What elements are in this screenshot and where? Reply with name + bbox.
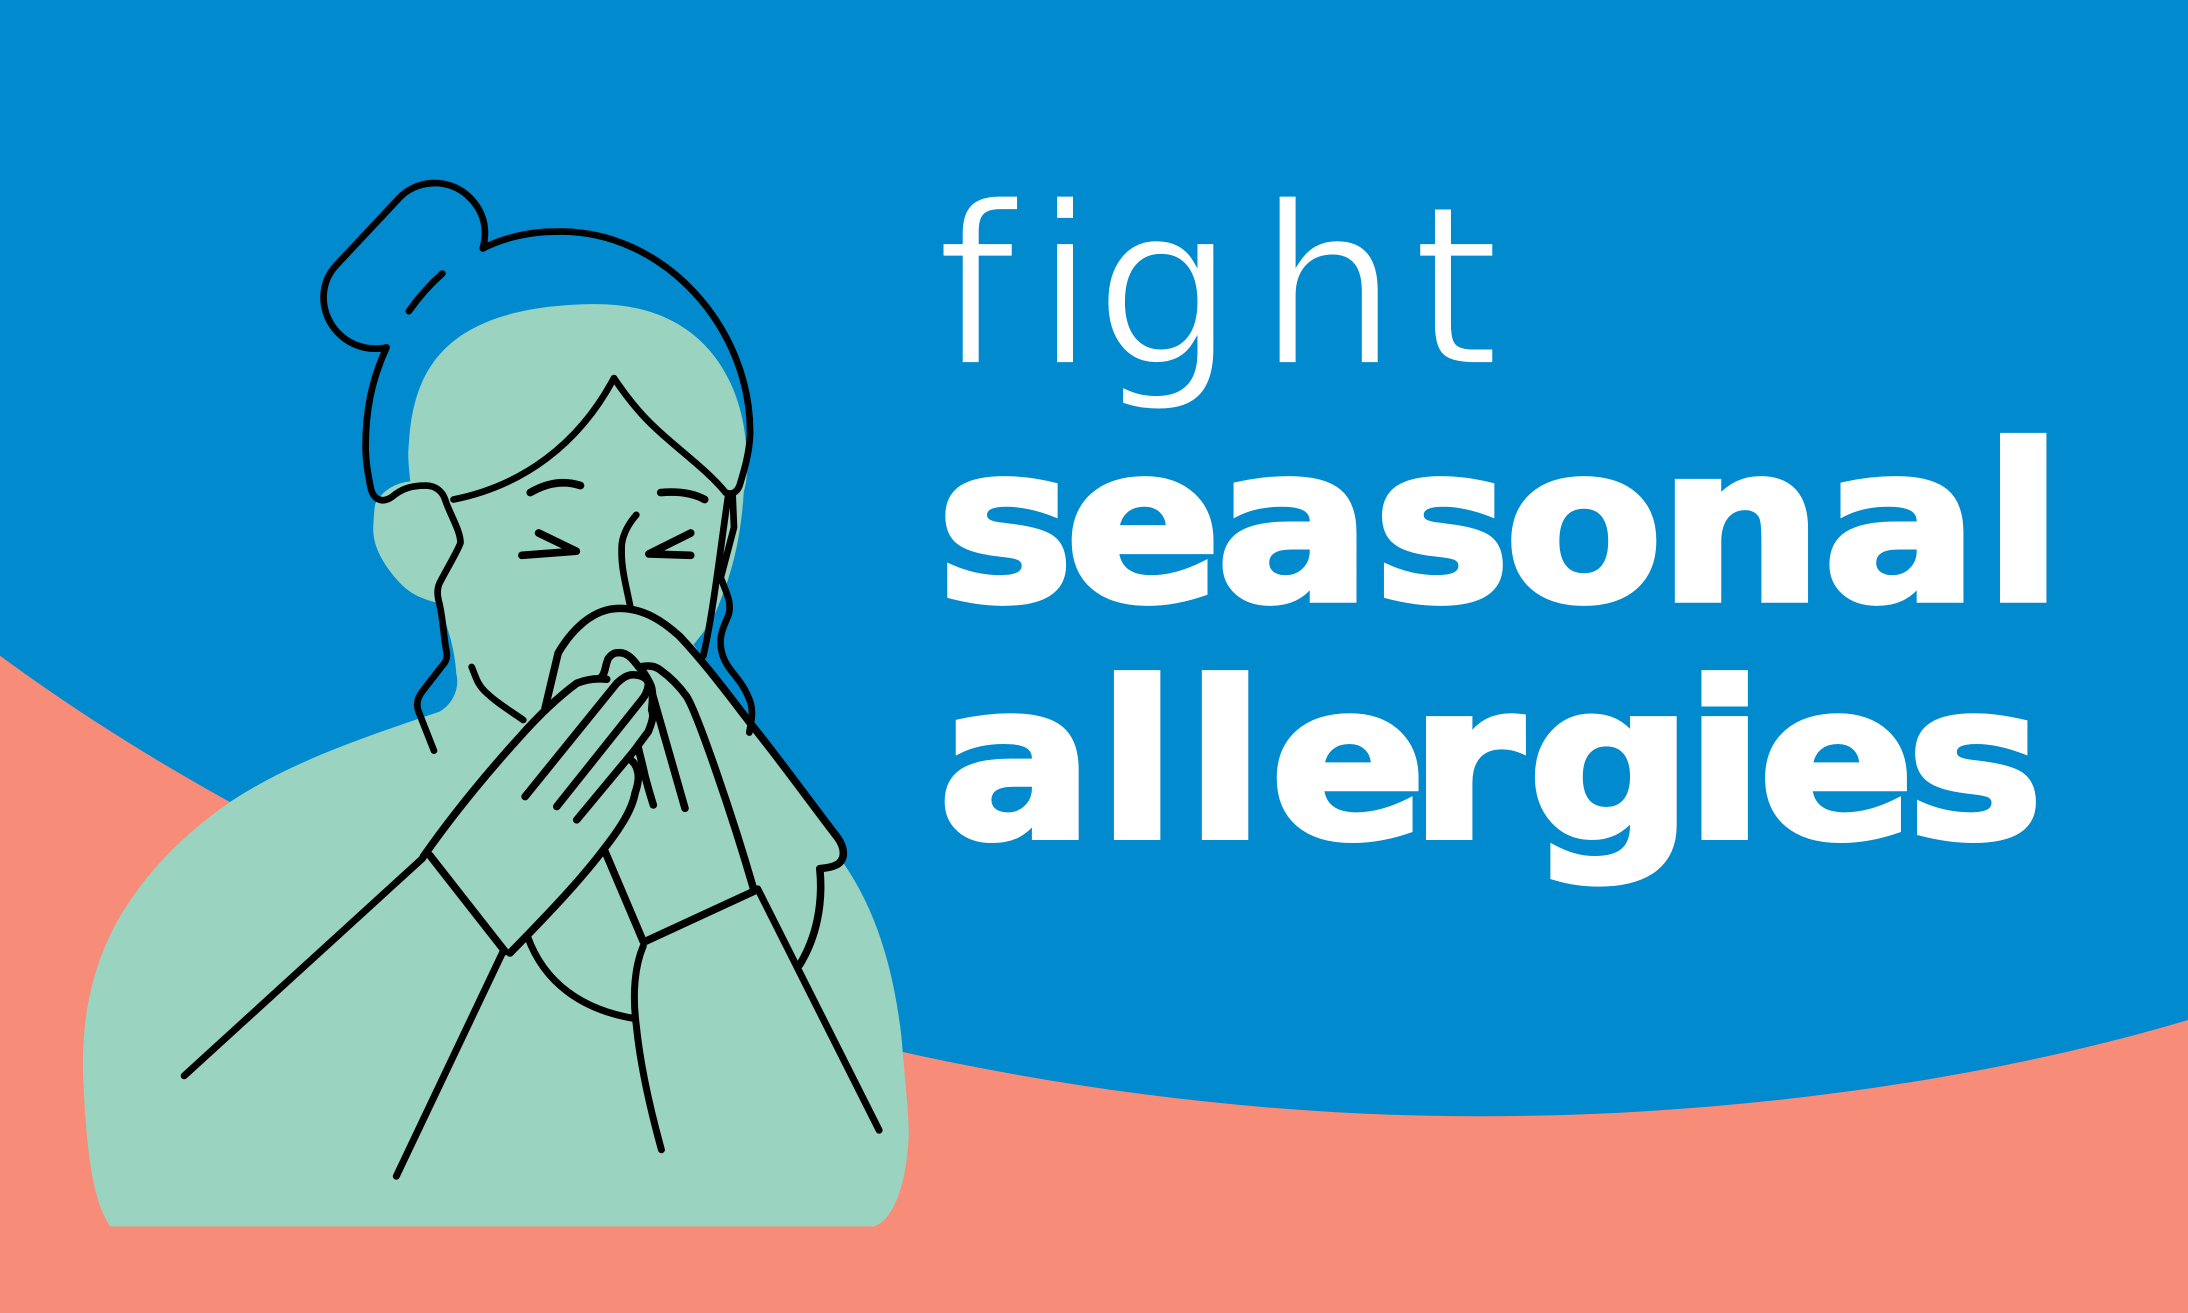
hands covering the nose [423,608,843,965]
cuffs and wrist [645,890,757,942]
title line: allergies: allergies [938,636,2044,888]
fingers [525,675,648,806]
title [936,157,2063,888]
background: salmon curved band [0,656,2188,1313]
sleeves and arm folds [184,858,879,1176]
face edge at right [703,494,728,656]
hair and bun outline [324,183,752,751]
green body and face silhouette [83,304,909,1226]
illustration: person sneezing [83,183,909,1226]
thumb [602,653,638,677]
back hand outline [545,608,843,965]
neck crease [472,667,523,720]
title line: seasonal: seasonal [936,399,2063,651]
eyebrows and squeezed eyes [522,483,705,555]
hair strand on bun [409,273,442,311]
nose [622,515,636,606]
fringe [454,378,726,500]
title line: fight: fight [936,157,1500,417]
front hand outline [423,679,607,857]
loose hair at right [721,494,752,733]
